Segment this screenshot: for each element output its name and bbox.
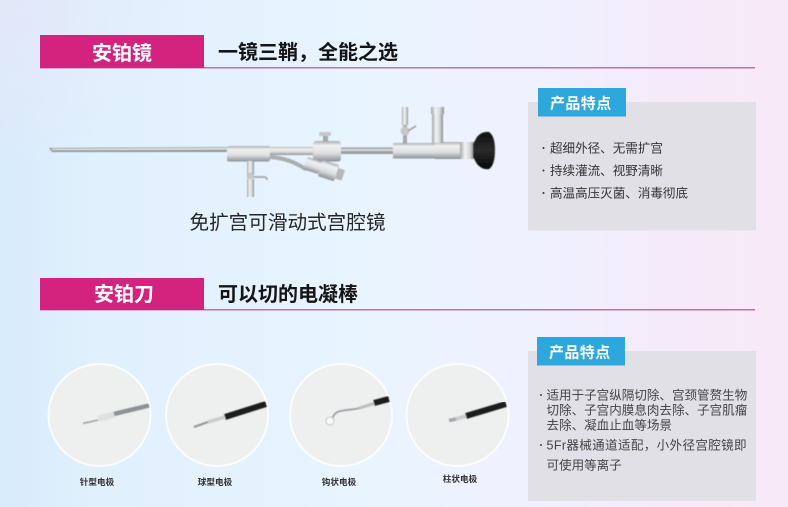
section header: 安铂刀: 安铂刀 <box>94 283 154 306</box>
feature list: 去除、凝血止血等场景 <box>546 418 672 432</box>
section header: 安铂刀: 可以切的电凝棒 <box>218 283 358 306</box>
illustration: hysteroscope <box>49 107 495 197</box>
electrode: column: 柱状电极 <box>443 473 478 484</box>
feature list: 持续灌流、视野清晰 <box>550 163 663 178</box>
panel: features of 安铂刀 <box>528 337 756 501</box>
electrode: hook <box>290 364 392 487</box>
electrode: ball: 球型电极 <box>198 476 233 487</box>
electrode: hook: 钩状电极 <box>322 476 357 487</box>
section header: 安铂刀 <box>40 278 755 310</box>
caption: hysteroscope name: 免扩宫可滑动式宫腔镜 <box>190 212 385 234</box>
section header: 安铂镜: 一镜三鞘，全能之选 <box>218 40 398 64</box>
tab: 产品特点: 产品特点 <box>550 94 612 112</box>
electrode: column <box>406 364 508 484</box>
tab: 产品特点 <box>537 337 625 366</box>
feature list: 超细外径、无需扩宫 <box>550 142 663 156</box>
section header: 安铂镜: 安铂镜 <box>92 41 152 65</box>
feature list: 适用于子宫纵隔切除、宫颈管赘生物 <box>546 388 747 402</box>
tab: 产品特点: 产品特点 <box>549 344 611 362</box>
feature list: 切除、子宫内膜息肉去除、子宫肌瘤 <box>546 402 748 418</box>
feature list: 可使用等离子 <box>546 458 622 472</box>
electrode: ball <box>166 364 268 487</box>
tab: 产品特点 <box>538 88 626 116</box>
feature list: 5Fr器械通道适配，小外径宫腔镜即 <box>546 438 747 452</box>
panel: features of 安铂镜 <box>528 88 756 230</box>
feature list <box>540 388 748 472</box>
feature list <box>542 142 688 200</box>
electrode: needle: 针型电极 <box>80 476 115 487</box>
electrode: needle <box>48 364 150 487</box>
section header: 安铂镜 <box>40 35 755 68</box>
feature list: 高温高压灭菌、消毒彻底 <box>550 186 688 200</box>
